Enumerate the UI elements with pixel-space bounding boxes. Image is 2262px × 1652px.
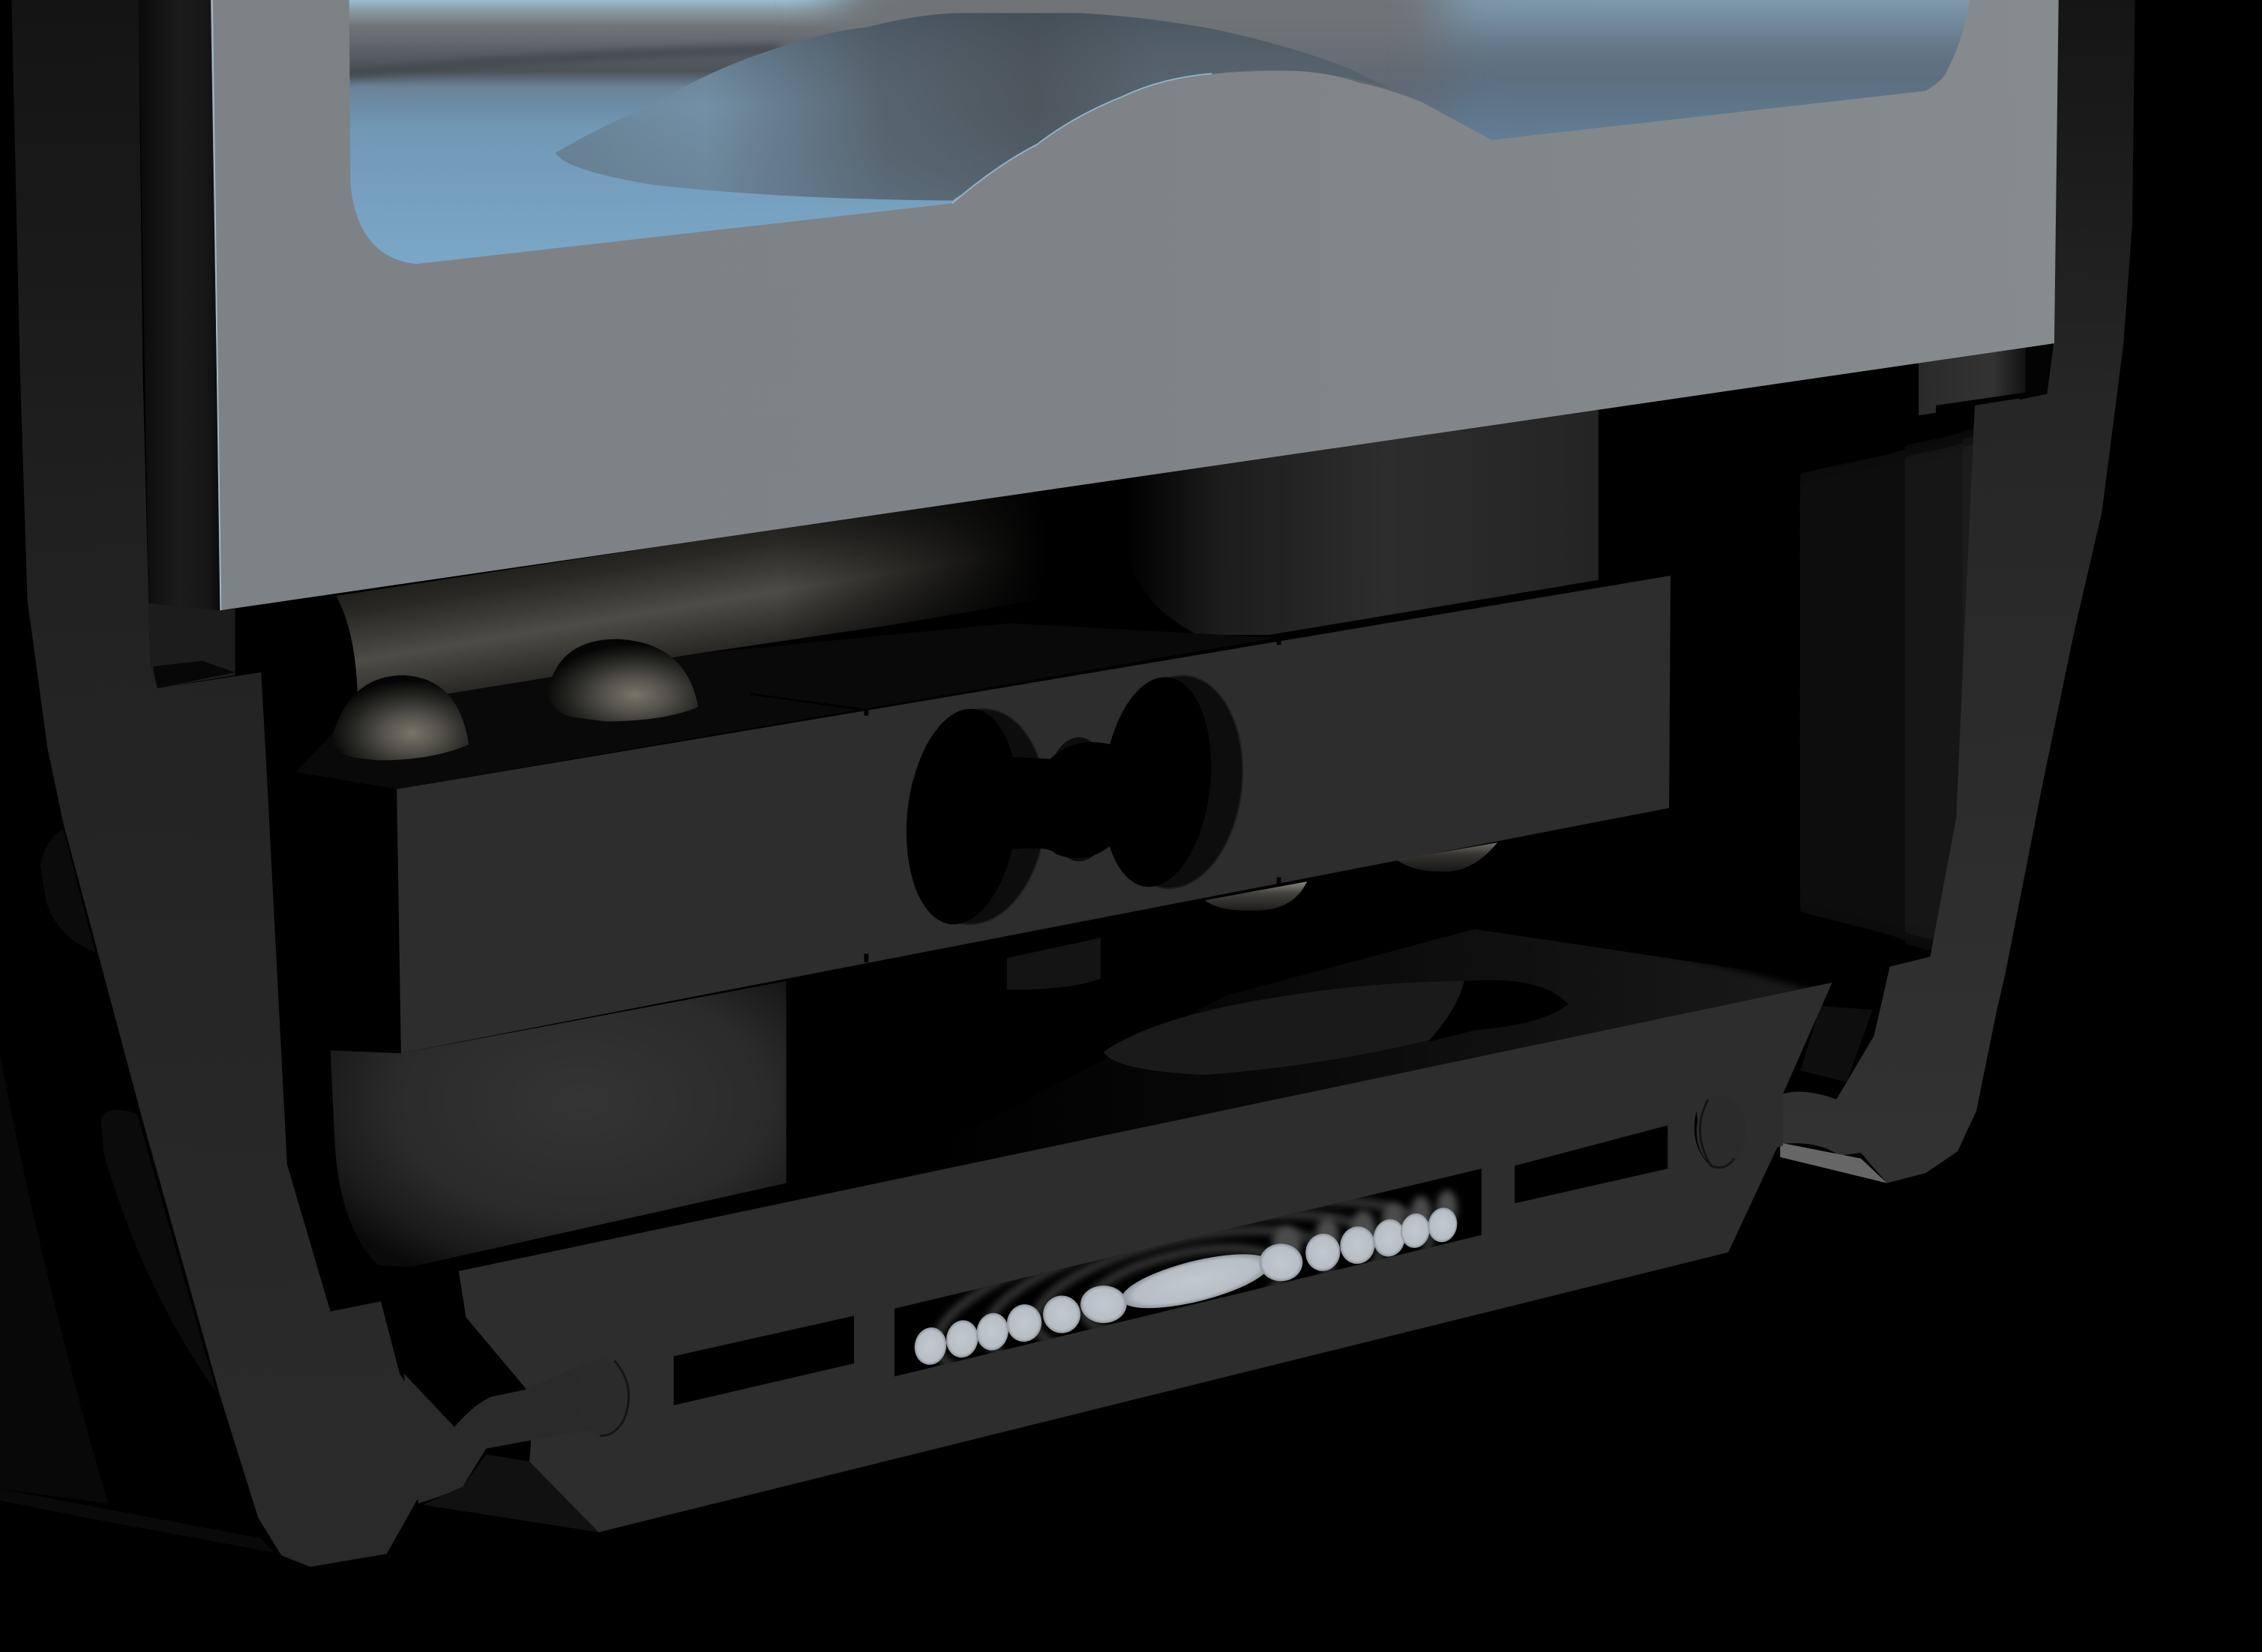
pin: under load cell [1007, 938, 1101, 989]
window: right surface [1419, 0, 1969, 139]
hinge left: pin edge [600, 1360, 629, 1435]
load cell: front face [397, 576, 1670, 1053]
bracket: grey face [1919, 348, 2025, 415]
load cell: black interior [897, 672, 1221, 930]
latch: right shiny edge [1780, 1143, 1887, 1183]
cavity gap: above shelf [1486, 906, 1875, 995]
screw head: left [1205, 881, 1307, 911]
recess: oval [1104, 981, 1490, 1075]
tray: speaker opening [894, 1169, 1482, 1376]
housing: right wall [1778, 0, 2135, 1183]
outer shell behind left [0, 830, 274, 1552]
screw: right [548, 639, 698, 721]
window: left dark arc [339, 49, 779, 75]
load cell: slit [751, 694, 865, 710]
bracket: black block [2020, 340, 2050, 400]
load cell: centre hole rim [1044, 738, 1113, 861]
screw head: right [1397, 842, 1497, 872]
load cell: left hole rim [897, 702, 1057, 932]
speaker beads [912, 1205, 1460, 1367]
load cell: notches [864, 638, 1281, 962]
tray: slot right [1514, 1125, 1667, 1203]
load cell: right hole rim [1098, 669, 1253, 895]
metal plate [211, 0, 2059, 610]
strip: plate left shadow [139, 0, 220, 610]
hinge right: pin edge [1700, 1100, 1734, 1168]
dark block: under right tray [1800, 1006, 1872, 1082]
load cell: top face [295, 624, 1277, 789]
speaker: concentric cone arcs [933, 1196, 1437, 1366]
window: centre surface [804, 0, 1480, 130]
rod: body [336, 488, 1046, 710]
rod: upper left [336, 476, 1053, 710]
dark triangle: under left tray [423, 1454, 599, 1532]
tray: slot left [674, 1316, 854, 1405]
cavity back wall: right [1717, 432, 1991, 952]
recess: far black end [1428, 980, 1568, 1042]
hinge right: arm [1721, 1073, 1783, 1166]
cylinder: upper [1125, 390, 1598, 635]
tray: front face [459, 983, 1832, 1532]
screws: under load cell [1205, 842, 1497, 911]
window: dome shading [556, 13, 1287, 201]
speaker: bead shadows right [1272, 1190, 1457, 1261]
hinge: left [404, 1357, 631, 1504]
speaker: centre bar [1117, 1243, 1275, 1319]
plate: left highlight edge [212, 0, 220, 610]
tray [459, 983, 1832, 1532]
rod: fade to black [765, 476, 1053, 649]
hinge right: slot crescent [1694, 1111, 1714, 1169]
window: hump edge highlight [952, 73, 1212, 203]
hinge left: pin disc [576, 1357, 631, 1435]
base shelf: top face [923, 929, 1832, 1169]
load cell [397, 576, 1670, 1053]
cylinder: lower [331, 981, 786, 1267]
screw: left [333, 675, 469, 760]
window: glass [346, 0, 1976, 274]
hinge right: pin disc [1697, 1095, 1745, 1167]
housing: left wall [11, 0, 421, 1567]
window [339, 0, 2048, 274]
window: dome [556, 13, 1392, 201]
notch: dark slot in ledge [153, 661, 235, 688]
ledge: left under plate [148, 603, 235, 688]
hinge left: arm [404, 1363, 631, 1504]
hinge: right [1694, 1073, 1783, 1169]
bracket: upper right [1919, 340, 2050, 415]
